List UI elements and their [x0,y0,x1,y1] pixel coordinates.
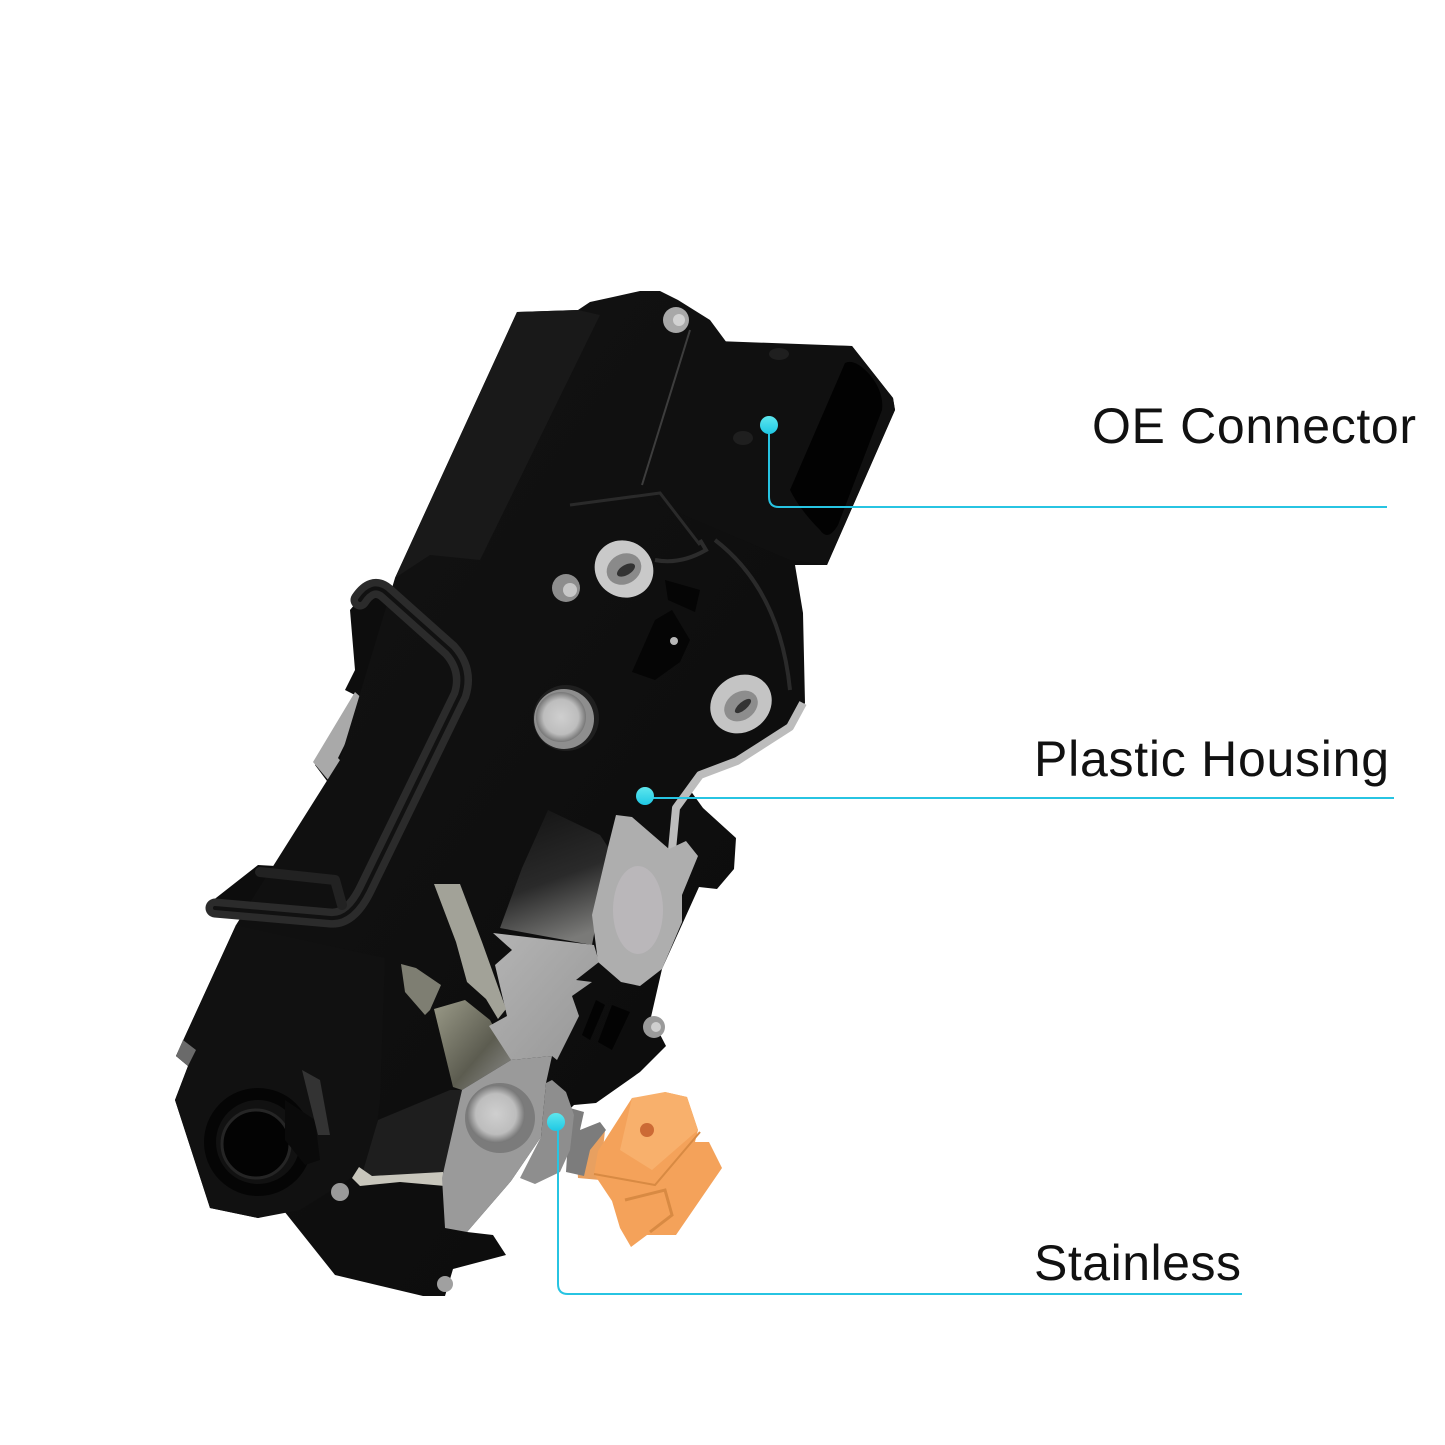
connector shell [640,340,895,565]
middle screw [552,574,580,602]
lever rivet [465,1083,535,1153]
main zinc plate [489,933,599,1060]
callout: OE Connector [760,398,1416,507]
orange clip stub [575,1130,605,1180]
marker dot [636,787,654,805]
connector seam highlight [642,330,690,485]
small screw [643,1016,665,1038]
latch plate bright edge [352,1167,445,1186]
label: Plastic Housing [1034,731,1389,787]
gasket rubber loop [215,588,462,918]
callout: Plastic Housing [636,731,1394,805]
cap side highlight [176,1040,196,1066]
sensor cover recess [632,540,706,680]
connector raised pin 2 [733,431,753,445]
marker dot [760,416,778,434]
label: OE Connector [1092,398,1416,454]
body edge shading [395,310,600,578]
bottom screw right [437,1276,453,1292]
lower grommet [699,663,783,745]
leader line [769,425,1387,507]
leader line [645,797,1394,799]
lower zinc plate [442,1056,552,1232]
main housing body [175,291,895,1296]
connector bottom lip [570,493,700,545]
label: Stainless [1034,1235,1241,1291]
washer stack [520,1080,574,1184]
left latch tab [401,964,441,1015]
metal latch behind gasket [313,692,372,820]
cylinder port [210,1070,330,1190]
connector socket opening [790,362,882,535]
dark zinc strap [434,1000,511,1090]
orange connector clip [594,1092,722,1247]
connector block [570,330,895,565]
lower left cap [175,925,385,1218]
rear round plate [592,815,698,986]
metal arm [672,703,803,850]
top screw [663,307,689,333]
upper grommet [583,529,665,609]
bottom screw left [331,1183,349,1201]
sensor disc outline [715,540,790,690]
door lock actuator product photo [175,291,895,1296]
large rivet [522,677,606,761]
dark metal bracket [500,810,610,945]
leader line [558,1122,1242,1294]
rear gasket backing block [207,580,472,925]
callout: Stainless [547,1113,1242,1294]
block slots [582,1000,630,1050]
latch plate shadow [361,1090,462,1178]
connector raised pin 1 [769,348,789,360]
orange clip shaft [566,1108,606,1176]
release lever [434,884,506,1019]
marker dot [547,1113,565,1131]
